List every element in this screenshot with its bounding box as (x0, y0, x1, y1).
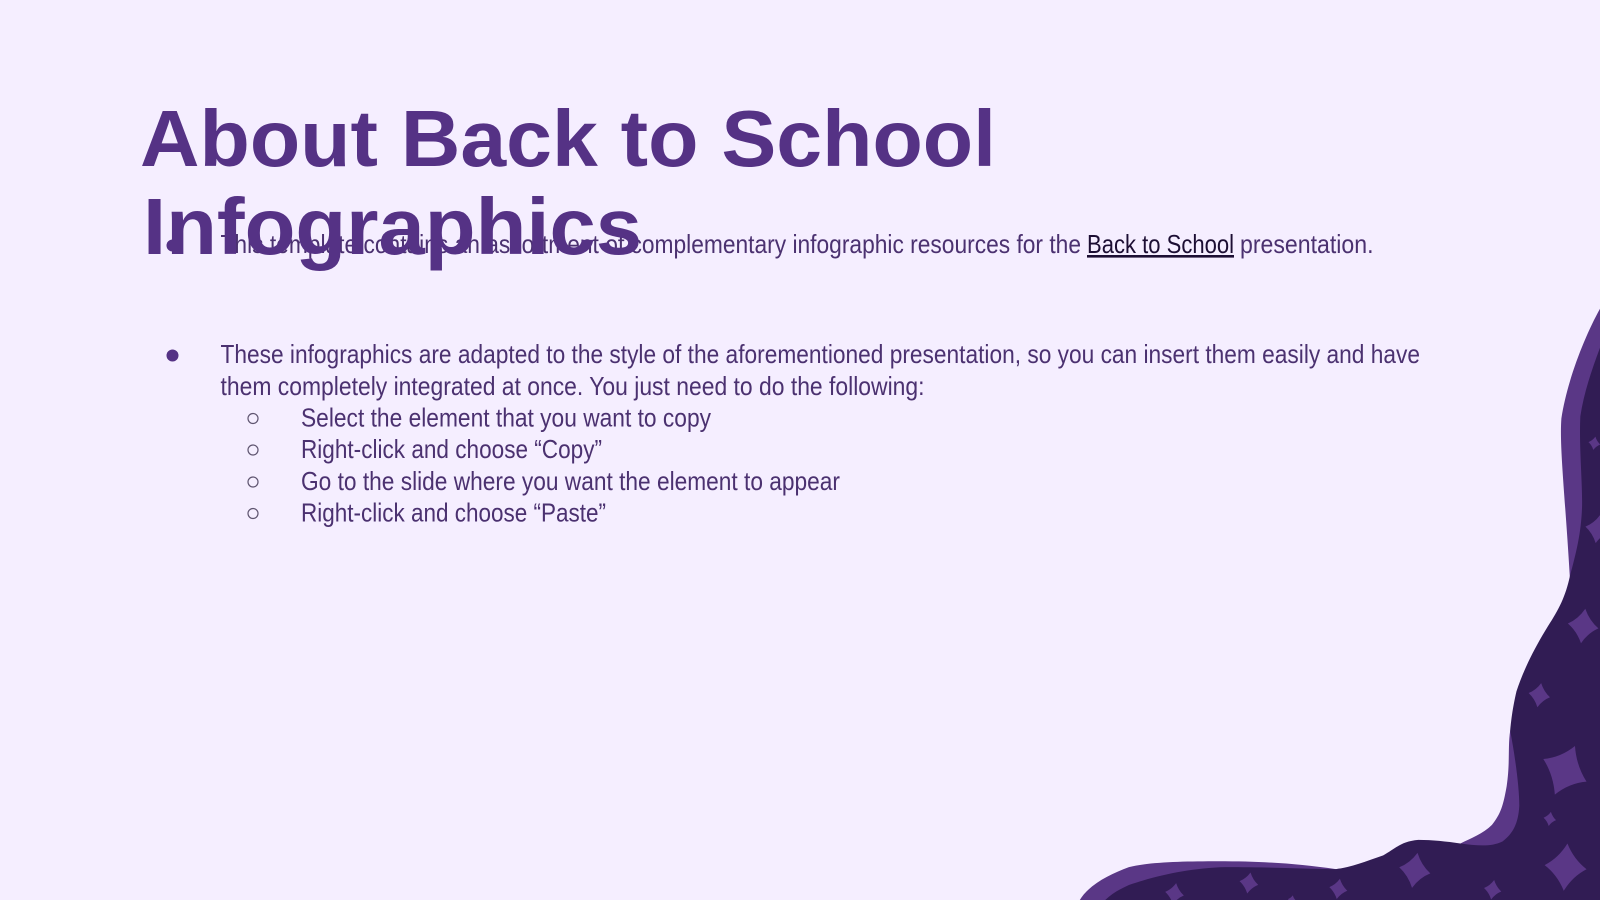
title (140, 94, 996, 271)
stars (1164, 436, 1600, 900)
decorative corner wave with stars (1080, 305, 1600, 900)
link: Back to School: Back to School (1087, 229, 1234, 259)
title line 2: Infographics (143, 182, 642, 271)
wave: dark front layer (1103, 341, 1600, 900)
paragraph 1 start: This template contains an assortment of complementary infographic resources for the (220, 229, 1081, 259)
wave: lighter back layer (1080, 305, 1600, 900)
step 2: Right-click and choose “Copy” (301, 434, 602, 464)
bullet 2 (166, 350, 178, 362)
step 4: Right-click and choose “Paste” (301, 498, 606, 528)
sub-bullet 4 (248, 508, 258, 518)
sub-bullet 3 (248, 477, 258, 487)
step 1: Select the element that you want to copy (301, 402, 711, 432)
paragraph 1 end: presentation. (1240, 229, 1374, 259)
bullet 1 (166, 240, 178, 252)
paragraph 2 line 1: These infographics are adapted to the style of the aforementioned presentation, so you can insert them easily and have (220, 339, 1420, 369)
paragraph 2 line 2: them completely integrated at once. You just need to do the following: (220, 371, 924, 401)
sub-bullet 1 (248, 414, 258, 424)
sub-bullet 2 (248, 445, 258, 455)
title line 1: About Back to School (140, 94, 996, 183)
body text (166, 229, 1420, 528)
step 3: Go to the slide where you want the element to appear (301, 466, 840, 496)
